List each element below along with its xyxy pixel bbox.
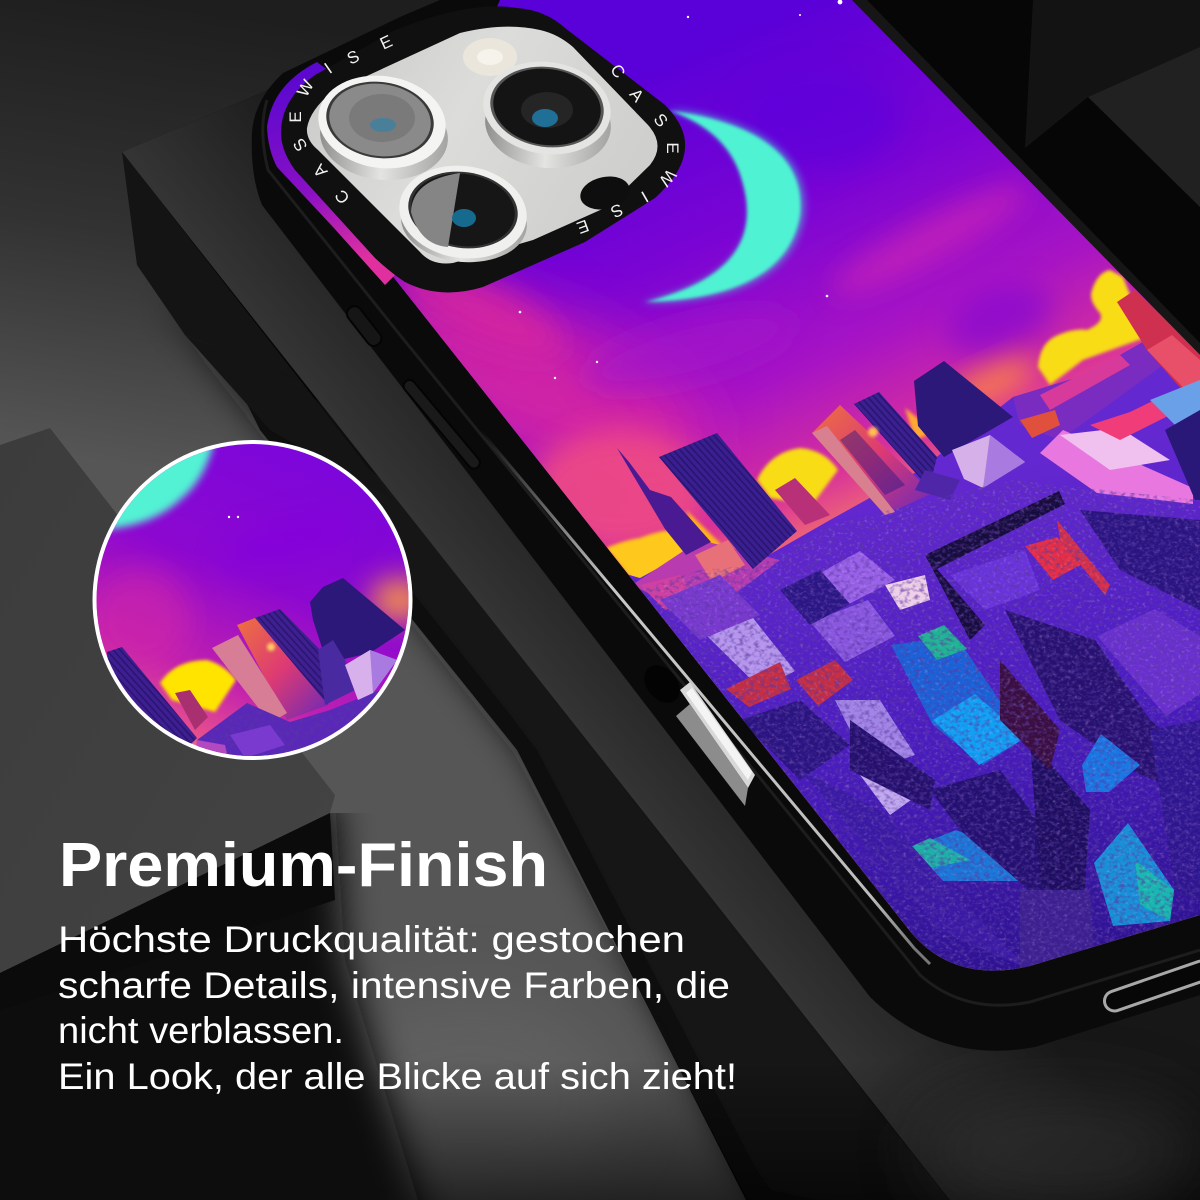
city texture: [640, 480, 1200, 1000]
yellow clouds: [606, 270, 1147, 590]
CASEWISE ring lettering: S: [289, 135, 311, 155]
CASEWISE ring lettering: W: [293, 77, 318, 100]
CASEWISE ring lettering: I: [638, 187, 652, 206]
inset sky: [96, 444, 408, 756]
teal and blue rooftops: [891, 625, 1174, 926]
city base: [612, 338, 1200, 1000]
CASEWISE ring lettering: W: [655, 165, 680, 190]
body copy: Ein Look, der alle Blicke auf sich zieht!: [58, 1056, 737, 1097]
right side buildings: [1020, 290, 1200, 610]
purple sliver: [267, 62, 398, 285]
zoom inset circle: [90, 440, 430, 770]
CASEWISE ring lettering: E: [286, 111, 305, 123]
body copy: Höchste Druckqualität: gestochen: [58, 919, 685, 960]
crescent moon: [640, 108, 804, 303]
inset cloud: [160, 660, 236, 712]
CASEWISE ring lettering: E: [663, 142, 682, 154]
signs and roofs: [660, 491, 1200, 815]
inset skyline: [107, 578, 412, 770]
CASEWISE ring lettering: I: [321, 59, 336, 78]
flash: [463, 38, 517, 76]
silver side button: [637, 658, 755, 806]
CASEWISE ring lettering: [286, 31, 682, 237]
CASEWISE ring lettering: E: [574, 216, 591, 237]
lens: top right: [477, 54, 617, 173]
lens: top left: [312, 68, 452, 185]
lens: bottom: [393, 158, 533, 267]
side button: small switch: [344, 303, 384, 349]
stars: [519, 0, 842, 379]
body copy: [58, 919, 737, 1097]
side button: volume: [401, 378, 482, 471]
skyline towers: [617, 361, 1025, 569]
charging port: [1102, 958, 1200, 1014]
screen artwork: [393, 0, 1200, 971]
heading: Premium-Finish: [59, 831, 548, 900]
CASEWISE ring lettering: A: [309, 160, 331, 181]
sky: [393, 0, 1200, 971]
phone body: [252, 0, 1200, 1051]
camera island: [267, 6, 685, 292]
CASEWISE ring lettering: A: [626, 85, 648, 106]
dark lower city: [800, 660, 1200, 970]
inset moon: [111, 448, 219, 536]
CASEWISE ring lettering: S: [344, 46, 362, 68]
inset stars: [228, 516, 239, 518]
sensor dot: [577, 172, 633, 214]
body copy: scharfe Details, intensive Farben, die: [58, 965, 730, 1006]
CASEWISE ring lettering: E: [377, 31, 395, 53]
CASEWISE ring lettering: C: [606, 61, 629, 82]
CASEWISE ring lettering: C: [331, 186, 354, 207]
CASEWISE ring lettering: S: [650, 110, 672, 131]
edge highlight: [480, 430, 930, 964]
body copy: nicht verblassen.: [58, 1010, 344, 1051]
CASEWISE ring lettering: S: [608, 200, 626, 222]
